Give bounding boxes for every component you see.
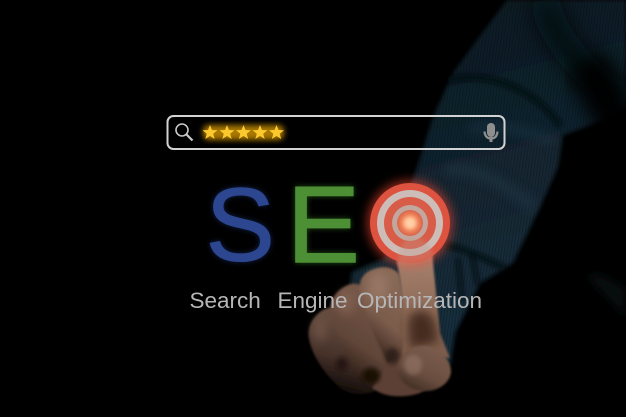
search bar outline <box>168 116 504 149</box>
thumb <box>397 346 451 391</box>
word: Optimization: Optimization <box>357 288 482 313</box>
SEO heading <box>206 164 453 286</box>
fingertip shadows <box>362 368 380 384</box>
ring finger <box>330 284 392 387</box>
word: Engine: Engine <box>278 288 348 313</box>
icon: red target as letter O <box>367 180 453 266</box>
middle finger <box>360 267 408 364</box>
letter S: S <box>206 168 275 284</box>
pinky finger <box>309 308 376 394</box>
letter S: S <box>206 168 275 284</box>
letter E: E <box>287 164 360 286</box>
knuckle highlights <box>314 272 389 342</box>
fingertip seen through target <box>398 238 433 264</box>
lower palm <box>372 352 440 396</box>
thumbnail <box>404 355 422 375</box>
icon: five gold stars <box>202 125 284 140</box>
icon: microphone <box>484 123 498 142</box>
hand pointing at target <box>309 236 451 396</box>
sleeve of the shirt <box>350 0 626 370</box>
search bar <box>168 116 504 149</box>
letter E: E <box>287 164 360 286</box>
palm shadow <box>408 311 438 348</box>
word: Search: Search <box>190 288 261 313</box>
tagline <box>190 288 482 313</box>
index finger and back of hand <box>397 236 450 358</box>
icon: magnifying glass <box>176 124 192 140</box>
